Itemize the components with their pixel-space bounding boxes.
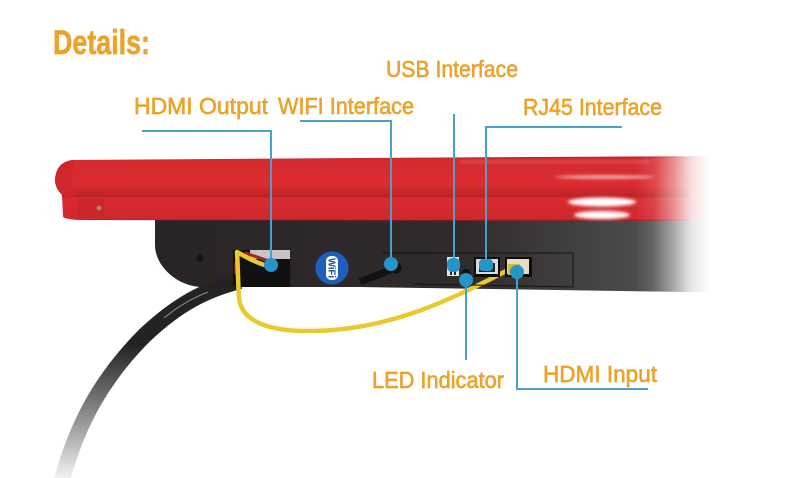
callout: LED Indicator	[372, 273, 504, 393]
black lower housing	[155, 220, 720, 292]
icon: WiFi sticker: WiFi	[326, 258, 338, 278]
yellow HDMI cable	[237, 252, 508, 331]
callout: RJ45 Interface: RJ45 Interface	[523, 94, 662, 120]
cable highlight	[164, 292, 208, 318]
device body	[55, 156, 720, 292]
callout: HDMI Output	[134, 93, 278, 272]
HDMI input port	[505, 257, 532, 277]
red housing end cap	[55, 160, 104, 218]
callout: WIFI Interface: WIFI Interface	[278, 93, 414, 119]
callout: WIFI Interface	[278, 93, 414, 271]
callout: USB Interface	[386, 56, 518, 272]
heading: Details: Details:	[53, 24, 150, 62]
port panel	[382, 253, 573, 287]
LED	[461, 269, 471, 279]
red housing highlights	[460, 161, 655, 219]
callout: HDMI Input	[510, 265, 658, 389]
callout: USB Interface: USB Interface	[386, 56, 518, 82]
right edge fade	[635, 150, 710, 298]
USB port	[447, 257, 459, 276]
callout: HDMI Output: HDMI Output	[134, 93, 269, 119]
screw	[196, 254, 204, 262]
callout: HDMI Input: HDMI Input	[543, 361, 658, 387]
HDMI output opening	[233, 250, 290, 287]
RJ45 port	[474, 257, 500, 277]
red top housing	[55, 156, 720, 221]
callout: RJ45 Interface	[479, 94, 662, 271]
black power cable	[62, 281, 240, 478]
icon: WiFi sticker	[316, 252, 348, 284]
WiFi antenna connector	[360, 262, 402, 282]
callout: LED Indicator: LED Indicator	[372, 367, 504, 393]
